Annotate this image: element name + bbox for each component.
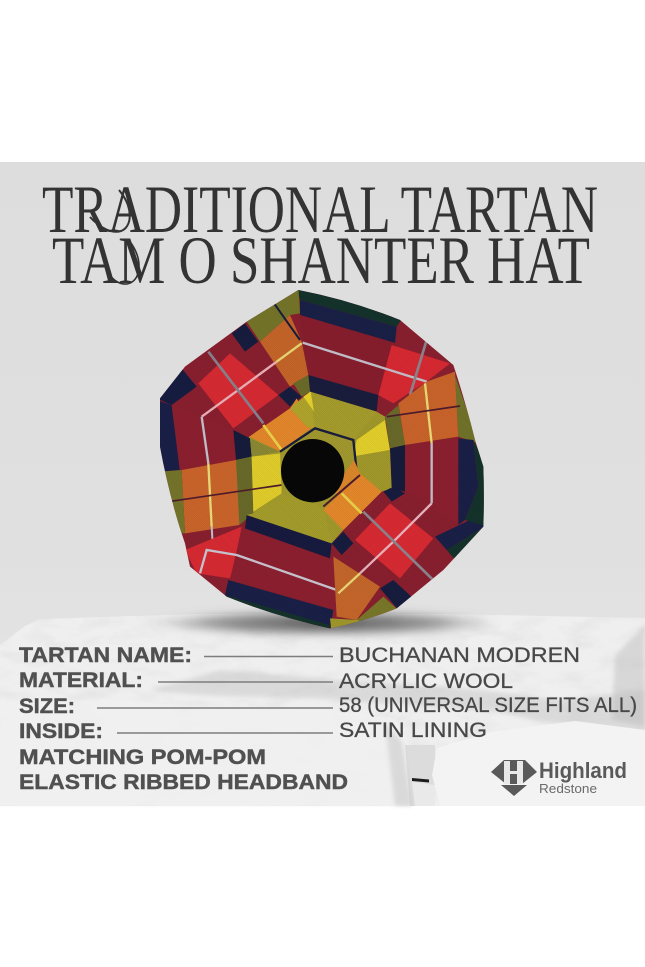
- logo: Highland Redstone: Redstone: [539, 781, 597, 796]
- spec values: 58 (UNIVERSAL SIZE FITS ALL): [339, 694, 637, 717]
- background panel: [0, 162, 645, 806]
- spec labels: [19, 644, 348, 794]
- panel: left: [157, 400, 282, 543]
- panel: right: [355, 372, 484, 526]
- spec labels: MATERIAL:: [19, 669, 143, 692]
- spec labels: ELASTIC RIBBED HEADBAND: [19, 771, 348, 794]
- pom-pom: [281, 439, 344, 502]
- hat shadow: [150, 609, 500, 637]
- spec values: [339, 644, 637, 742]
- logo: Highland Redstone: Highland: [539, 758, 627, 783]
- panel: top: [298, 290, 450, 412]
- spec labels: INSIDE:: [19, 720, 103, 743]
- centre crown: [280, 428, 360, 507]
- spec labels: MATCHING POM-POM: [19, 746, 266, 769]
- panel: bottom: [185, 493, 337, 633]
- title: [42, 171, 598, 298]
- spec labels: SIZE:: [19, 695, 75, 718]
- panel: upper left: [157, 287, 315, 452]
- icon: diamond emblem: [491, 760, 537, 796]
- logo: Highland Redstone: [491, 758, 627, 796]
- tartan hat: [160, 290, 484, 628]
- rocks: [0, 612, 645, 806]
- spec values: ACRYLIC WOOL: [339, 670, 513, 693]
- spec labels: TARTAN NAME:: [19, 644, 192, 667]
- panel: lower right: [323, 473, 487, 633]
- spec values: SATIN LINING: [339, 719, 487, 742]
- spec values: BUCHANAN MODREN: [339, 644, 580, 667]
